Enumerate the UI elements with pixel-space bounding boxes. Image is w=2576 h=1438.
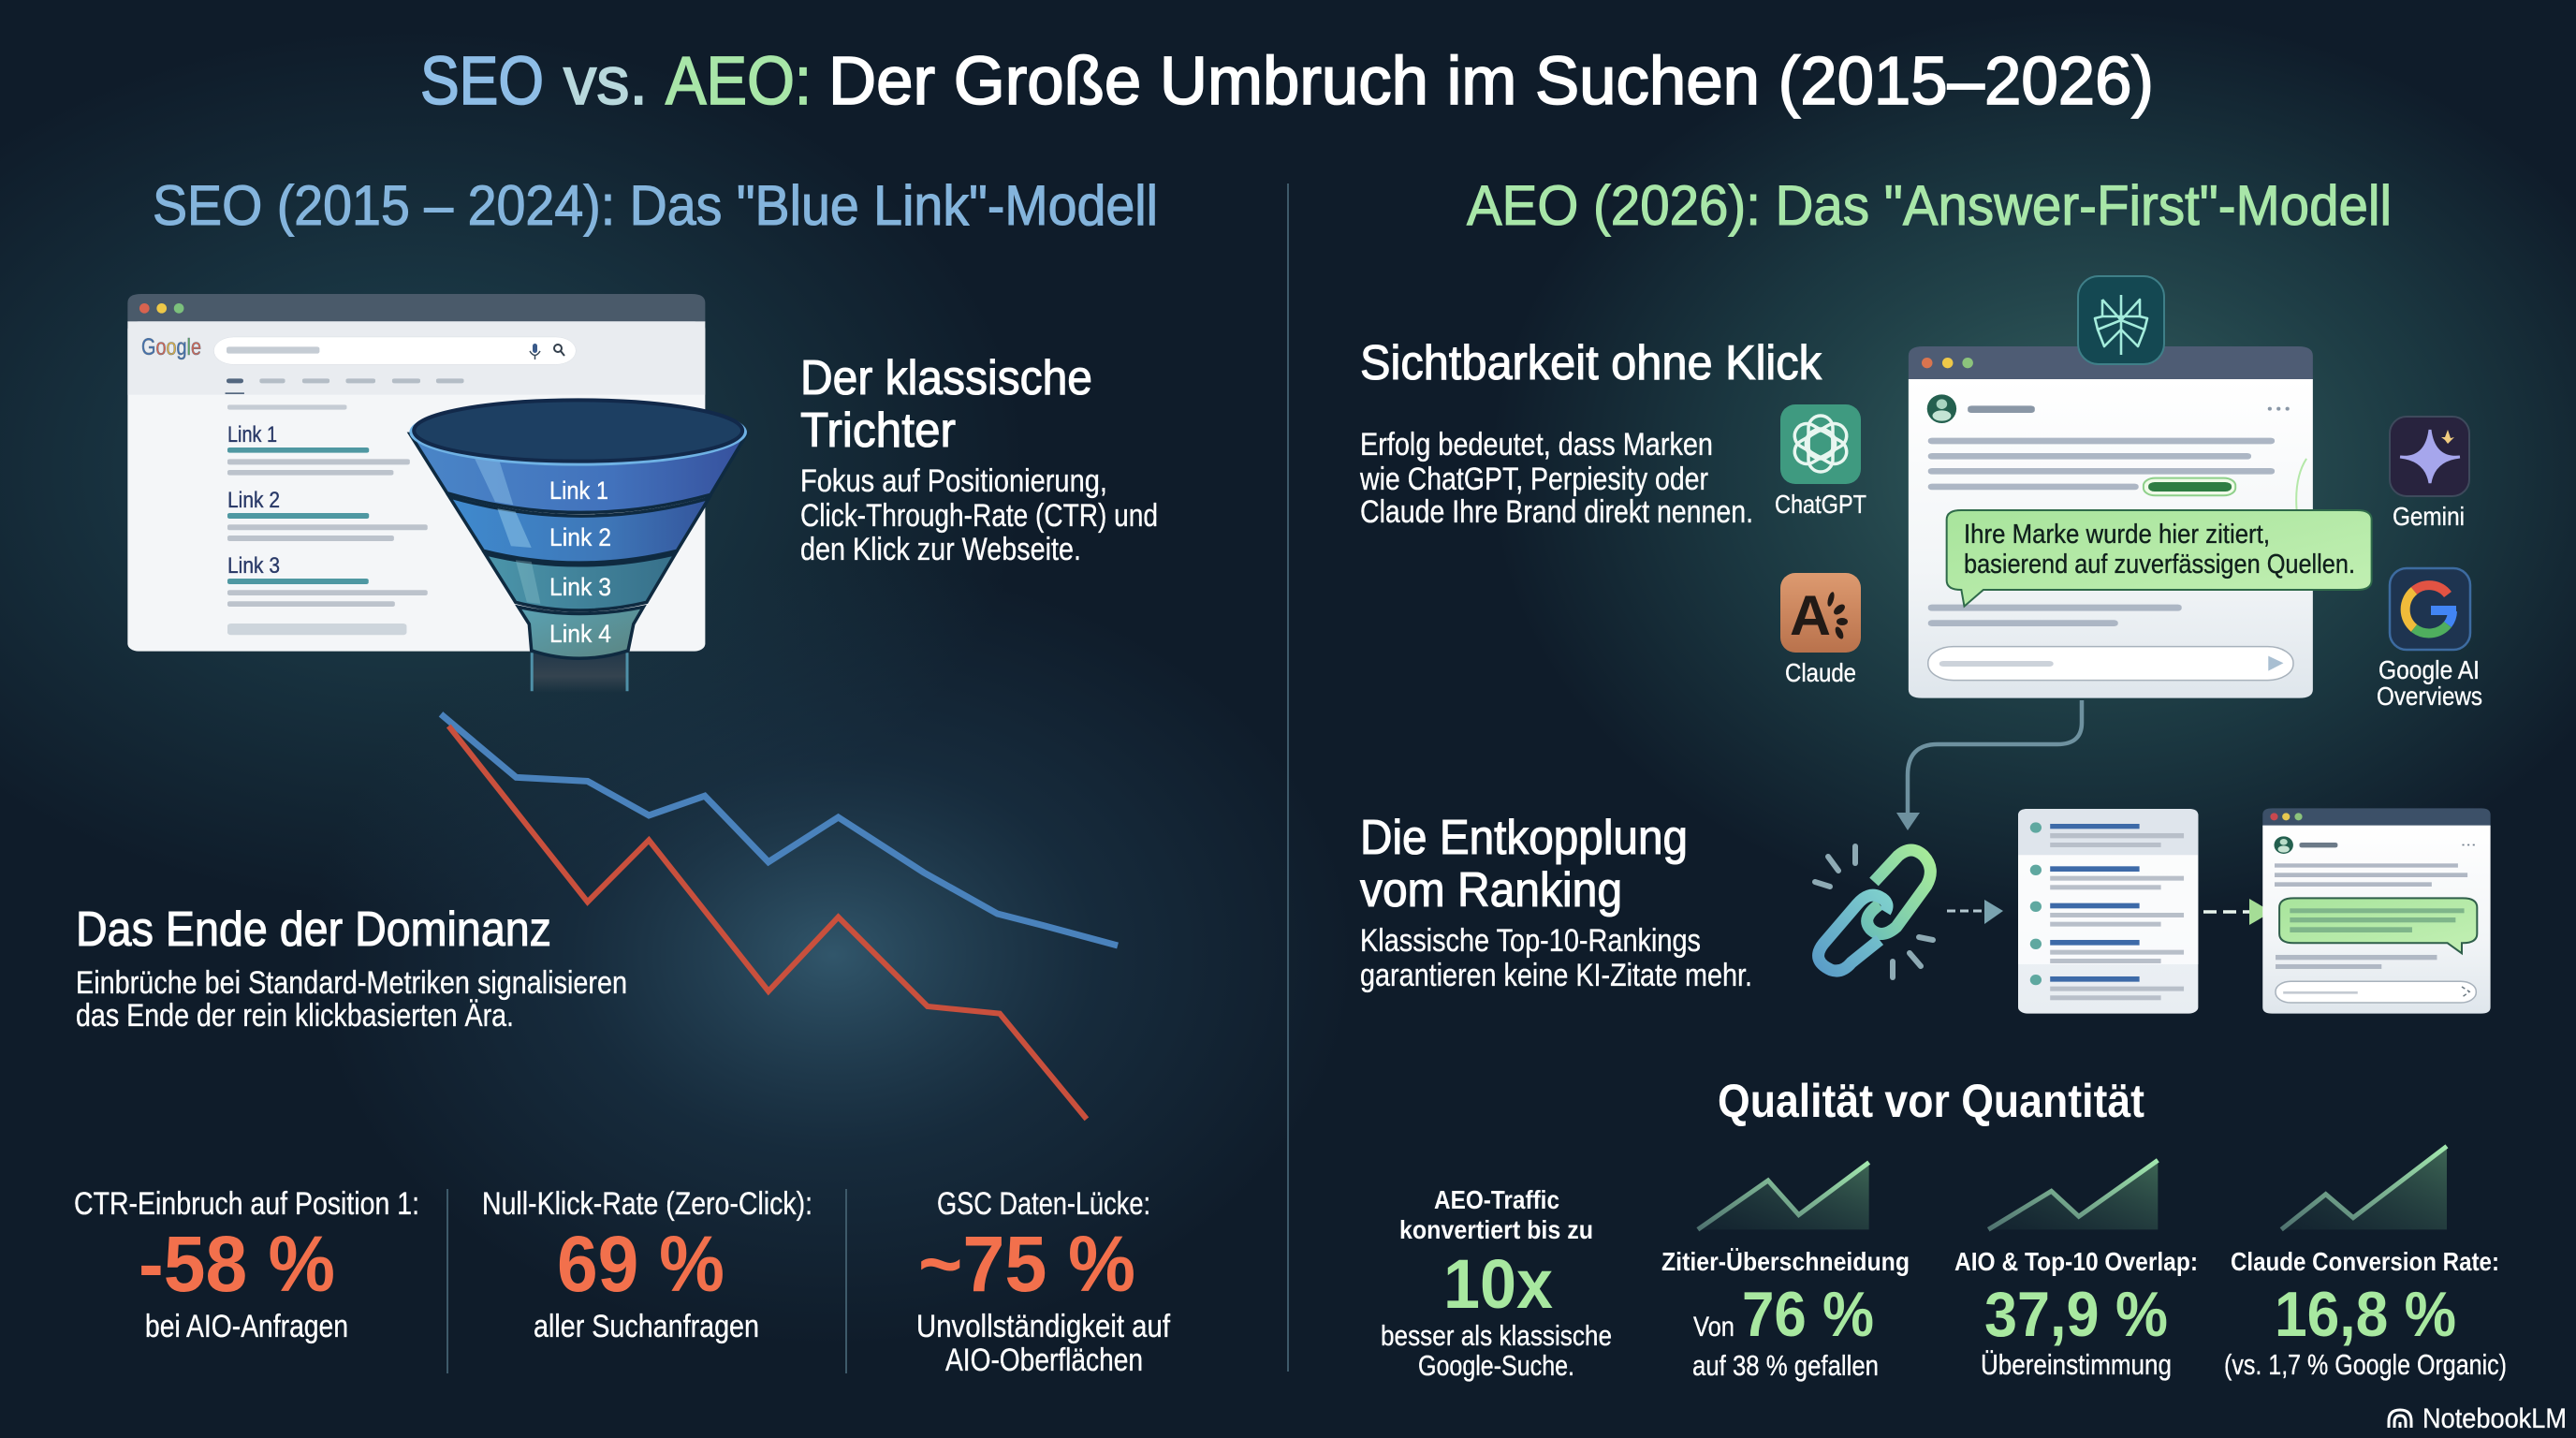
text block: Sichtbarkeit ohne Klick: wie ChatGPT, Perpiesity oder xyxy=(1359,462,1708,497)
stat: 10x xyxy=(1381,1185,1612,1382)
stat: Zitier-Überschneidung: Von xyxy=(1693,1312,1734,1343)
text block: Sichtbarkeit ohne Klick xyxy=(1359,336,1822,530)
panel: SEO xyxy=(74,174,1170,1378)
text block: Sichtbarkeit ohne Klick: Claude Ihre Brand direkt nennen. xyxy=(1360,494,1753,530)
stat: GSC Daten-Lücke: GSC Daten-Lücke: xyxy=(937,1186,1150,1222)
arrow: dashed to AI answer xyxy=(2203,899,2272,925)
stat: Claude Conversion Rate: Claude Conversion Rate: xyxy=(2231,1247,2499,1276)
icon: Google AI Overviews xyxy=(2390,568,2470,650)
text block: Die Entkopplung vom Ranking: garantieren keine KI-Zitate mehr. xyxy=(1360,958,1752,993)
mini chart xyxy=(1698,1163,1869,1229)
arrow: connector from answer window to chain xyxy=(1896,700,2082,830)
stat: CTR-Einbruch: bei AIO-Anfragen xyxy=(145,1309,348,1344)
stat: Zitier-Überschneidung xyxy=(1661,1163,1910,1382)
icon: Gemini xyxy=(2390,417,2469,496)
stat: GSC Daten-Lücke: AIO-Oberflächen xyxy=(945,1343,1143,1378)
icon: broken chain link xyxy=(1815,846,1933,977)
icon: Claude: A xyxy=(1790,584,1831,647)
funnel labels xyxy=(549,477,611,648)
stat: Zitier-Überschneidung: Zitier-Überschneidung xyxy=(1661,1247,1910,1276)
stat: Claude Conversion Rate xyxy=(2224,1146,2507,1381)
funnel labels: Link 2 xyxy=(549,523,611,551)
text block: Der klassische Trichter: Fokus auf Positionierung, xyxy=(800,463,1107,499)
result links xyxy=(227,422,280,579)
panel: mini answer window xyxy=(2262,808,2491,1014)
blue line xyxy=(441,714,1118,946)
text block: Sichtbarkeit ohne Klick: Erfolg bedeutet, dass Marken xyxy=(1360,427,1713,462)
title: vs. xyxy=(564,44,648,119)
label: Google AI Overviews: Overviews xyxy=(2377,682,2482,711)
funnel labels: Link 4 xyxy=(549,620,611,648)
funnel labels: Link 3 xyxy=(549,573,611,601)
mini chart xyxy=(1988,1160,2158,1229)
title: Der Große Umbruch im Suchen (2015–2026) xyxy=(828,44,2154,119)
funnel labels: Link 1 xyxy=(549,477,608,505)
label: Google AI Overviews: Google AI xyxy=(2378,655,2480,684)
panel: AEO xyxy=(1359,174,2507,1382)
result links: Link 3 xyxy=(227,553,280,579)
text block: Das Ende der Dominanz: das Ende der rein klickbasierten Ära. xyxy=(76,998,514,1034)
panel: ranking list xyxy=(2018,809,2198,1014)
answer browser window xyxy=(1909,346,2372,698)
result links: Link 1 xyxy=(227,422,277,448)
title: SEO xyxy=(420,44,544,119)
text block: Sichtbarkeit ohne Klick: Sichtbarkeit ohne Klick xyxy=(1360,336,1822,390)
chart: declining lines xyxy=(441,714,1118,1119)
icon: mic and search xyxy=(530,344,564,360)
mini chart xyxy=(2281,1146,2447,1229)
stat: 10x: besser als klassische xyxy=(1381,1319,1612,1352)
label: ChatGPT: ChatGPT xyxy=(1775,490,1866,519)
stat: AIO & Top-10 Overlap: AIO & Top-10 Overlap: xyxy=(1954,1247,2198,1276)
callout: brand cited: Ihre Marke wurde hier zitiert, xyxy=(1964,520,2270,550)
text block: Das Ende der Dominanz: Das Ende der Dominanz xyxy=(76,902,551,957)
label: Gemini: Gemini xyxy=(2393,502,2465,531)
text block: Das Ende der Dominanz xyxy=(76,902,627,1034)
label: Google AI Overviews xyxy=(2377,655,2482,711)
divider between SEO and AEO xyxy=(1287,183,1289,1372)
text block: Die Entkopplung vom Ranking xyxy=(1360,811,1752,993)
stat: CTR-Einbruch: CTR-Einbruch auf Position 1: xyxy=(74,1186,419,1222)
text block: Der klassische Trichter: Der klassische xyxy=(800,351,1092,405)
stat: CTR-Einbruch: -58 % xyxy=(139,1220,335,1308)
icon: ChatGPT xyxy=(1780,404,1861,484)
stat: Null-Klick-Rate: Null-Klick-Rate (Zero-Click): xyxy=(482,1186,812,1222)
text block: Der klassische Trichter: Click-Through-Rate (CTR) und xyxy=(800,498,1158,534)
text block: Der klassische Trichter xyxy=(800,351,1158,567)
red line xyxy=(448,726,1087,1119)
stat: AIO & Top-10 Overlap xyxy=(1954,1160,2198,1381)
icon: Perplexity badge xyxy=(2078,276,2164,364)
stat: AIO & Top-10 Overlap: 37,9 % xyxy=(1984,1279,2168,1350)
heading: AEO: AEO (2026): Das "Answer-First"-Modell xyxy=(1467,174,2392,237)
text block: Der klassische Trichter: Trichter xyxy=(800,404,956,458)
Google logo: Google xyxy=(141,334,201,360)
label: Claude: Claude xyxy=(1785,658,1856,687)
stat: Null-Klick-Rate: 69 % xyxy=(557,1220,724,1308)
heading: Qualität vor Quantität: Qualität vor Quantität xyxy=(1718,1075,2144,1127)
stat: GSC Daten-Lücke: Unvollständigkeit auf xyxy=(916,1309,1170,1344)
text block: Die Entkopplung vom Ranking: Die Entkopplung xyxy=(1360,811,1688,865)
stat: Zitier-Überschneidung: auf 38 % gefallen xyxy=(1692,1349,1879,1382)
text block: Das Ende der Dominanz: Einbrüche bei Standard-Metriken signalisieren xyxy=(76,965,627,1001)
stat: GSC Daten-Lücke: ~75 % xyxy=(918,1220,1135,1308)
arrow: dashed to ranking list xyxy=(1947,900,2003,924)
title: AEO: xyxy=(666,44,812,119)
callout: brand cited xyxy=(1947,510,2372,607)
result links: Link 2 xyxy=(227,488,280,513)
stat: 10x: Google-Suche. xyxy=(1418,1349,1574,1382)
text block: Der klassische Trichter: den Klick zur Webseite. xyxy=(800,532,1081,567)
search results browser window xyxy=(127,294,705,652)
stat: AIO & Top-10 Overlap: Übereinstimmung xyxy=(1981,1348,2172,1381)
stat: GSC Daten-Lücke xyxy=(916,1186,1170,1378)
icon: Claude xyxy=(1780,573,1861,653)
stat: Null-Klick-Rate xyxy=(482,1186,812,1344)
stat: Claude Conversion Rate: (vs. 1,7 % Google Organic) xyxy=(2224,1348,2507,1381)
text block: Die Entkopplung vom Ranking: Klassische Top-10-Rankings xyxy=(1360,923,1701,959)
stat: 10x: 10x xyxy=(1443,1245,1553,1323)
text block: Die Entkopplung vom Ranking: vom Ranking xyxy=(1360,863,1622,917)
funnel xyxy=(409,399,747,693)
stat: Null-Klick-Rate: aller Suchanfragen xyxy=(534,1309,759,1344)
stat: Claude Conversion Rate: 16,8 % xyxy=(2275,1279,2456,1350)
stat: 10x: konvertiert bis zu xyxy=(1399,1215,1593,1244)
stat: CTR-Einbruch xyxy=(74,1186,419,1344)
callout: brand cited: basierend auf zuverfässigen Quellen. xyxy=(1964,550,2355,580)
stat: 10x: AEO-Traffic xyxy=(1434,1185,1559,1214)
stat: Zitier-Überschneidung: 76 % xyxy=(1742,1279,1874,1350)
heading: SEO: SEO (2015 – 2024): Das "Blue Link"-Modell xyxy=(153,174,1158,237)
